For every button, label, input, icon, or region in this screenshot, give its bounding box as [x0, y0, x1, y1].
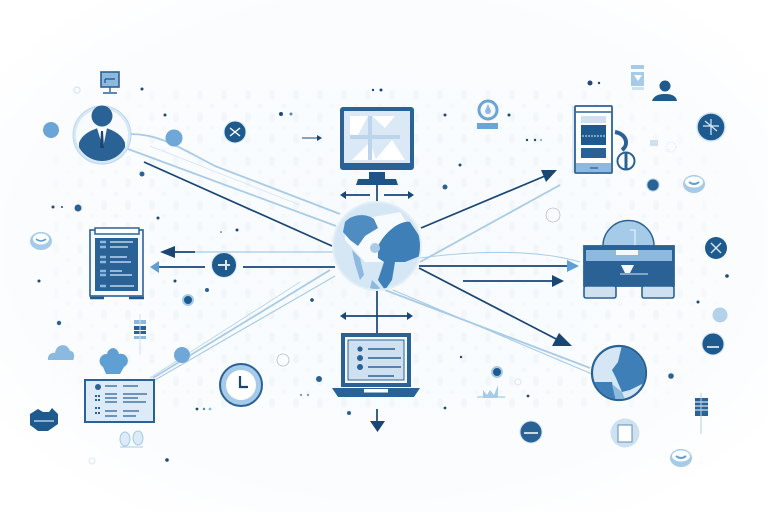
top-right icons — [546, 65, 725, 222]
top monitor — [340, 107, 414, 185]
bottom-left icons — [30, 314, 190, 464]
right phone — [572, 106, 612, 173]
clock — [220, 354, 289, 406]
small left icons — [30, 87, 246, 305]
scattered dots — [38, 80, 729, 462]
person avatar — [73, 106, 131, 165]
central globe — [333, 202, 422, 292]
icon: small top-left monitor — [101, 72, 119, 93]
right globe — [590, 345, 650, 402]
bottom-left list panel — [85, 380, 154, 422]
left checklist panel — [90, 228, 144, 298]
dark connection arrows — [144, 135, 579, 432]
icon: drop gauge — [477, 101, 498, 129]
light connection lines — [128, 134, 592, 380]
phone accessories — [615, 132, 634, 170]
right small icons — [477, 237, 728, 467]
bottom laptop — [332, 333, 420, 397]
right server device — [584, 221, 674, 298]
